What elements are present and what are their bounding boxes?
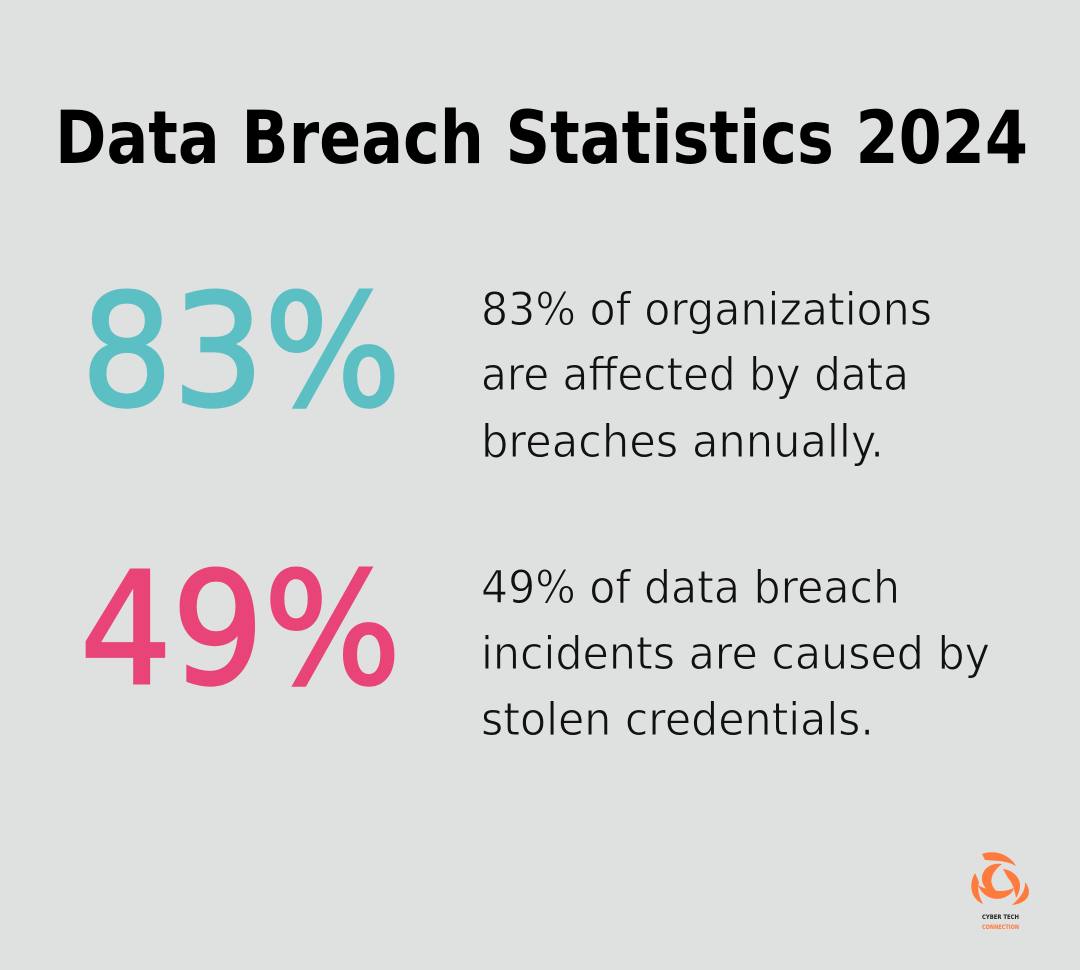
description: 49% of data breach: 49% of data breach [481, 561, 900, 614]
description: 83% of organizations: are affected by data [481, 348, 909, 401]
description: 83% of organizations [481, 283, 932, 468]
statistic: 83%: 83% [81, 261, 401, 442]
logo: Cyber Tech Connection [971, 852, 1029, 931]
description: 49% of data breach [481, 561, 990, 746]
logo text: CONNECTION: CONNECTION [982, 923, 1019, 931]
logo text: CYBER TECH: CYBER TECH [982, 913, 1019, 921]
statistic: 49%: 49% [80, 539, 401, 720]
description: 49% of data breach: stolen credentials. [481, 693, 874, 746]
description: 83% of organizations: breaches annually. [481, 415, 884, 468]
description: 49% of data breach: incidents are caused by [481, 627, 990, 680]
icon: orange swirl [971, 852, 1029, 905]
description: 83% of organizations: 83% of organizations [481, 283, 932, 336]
